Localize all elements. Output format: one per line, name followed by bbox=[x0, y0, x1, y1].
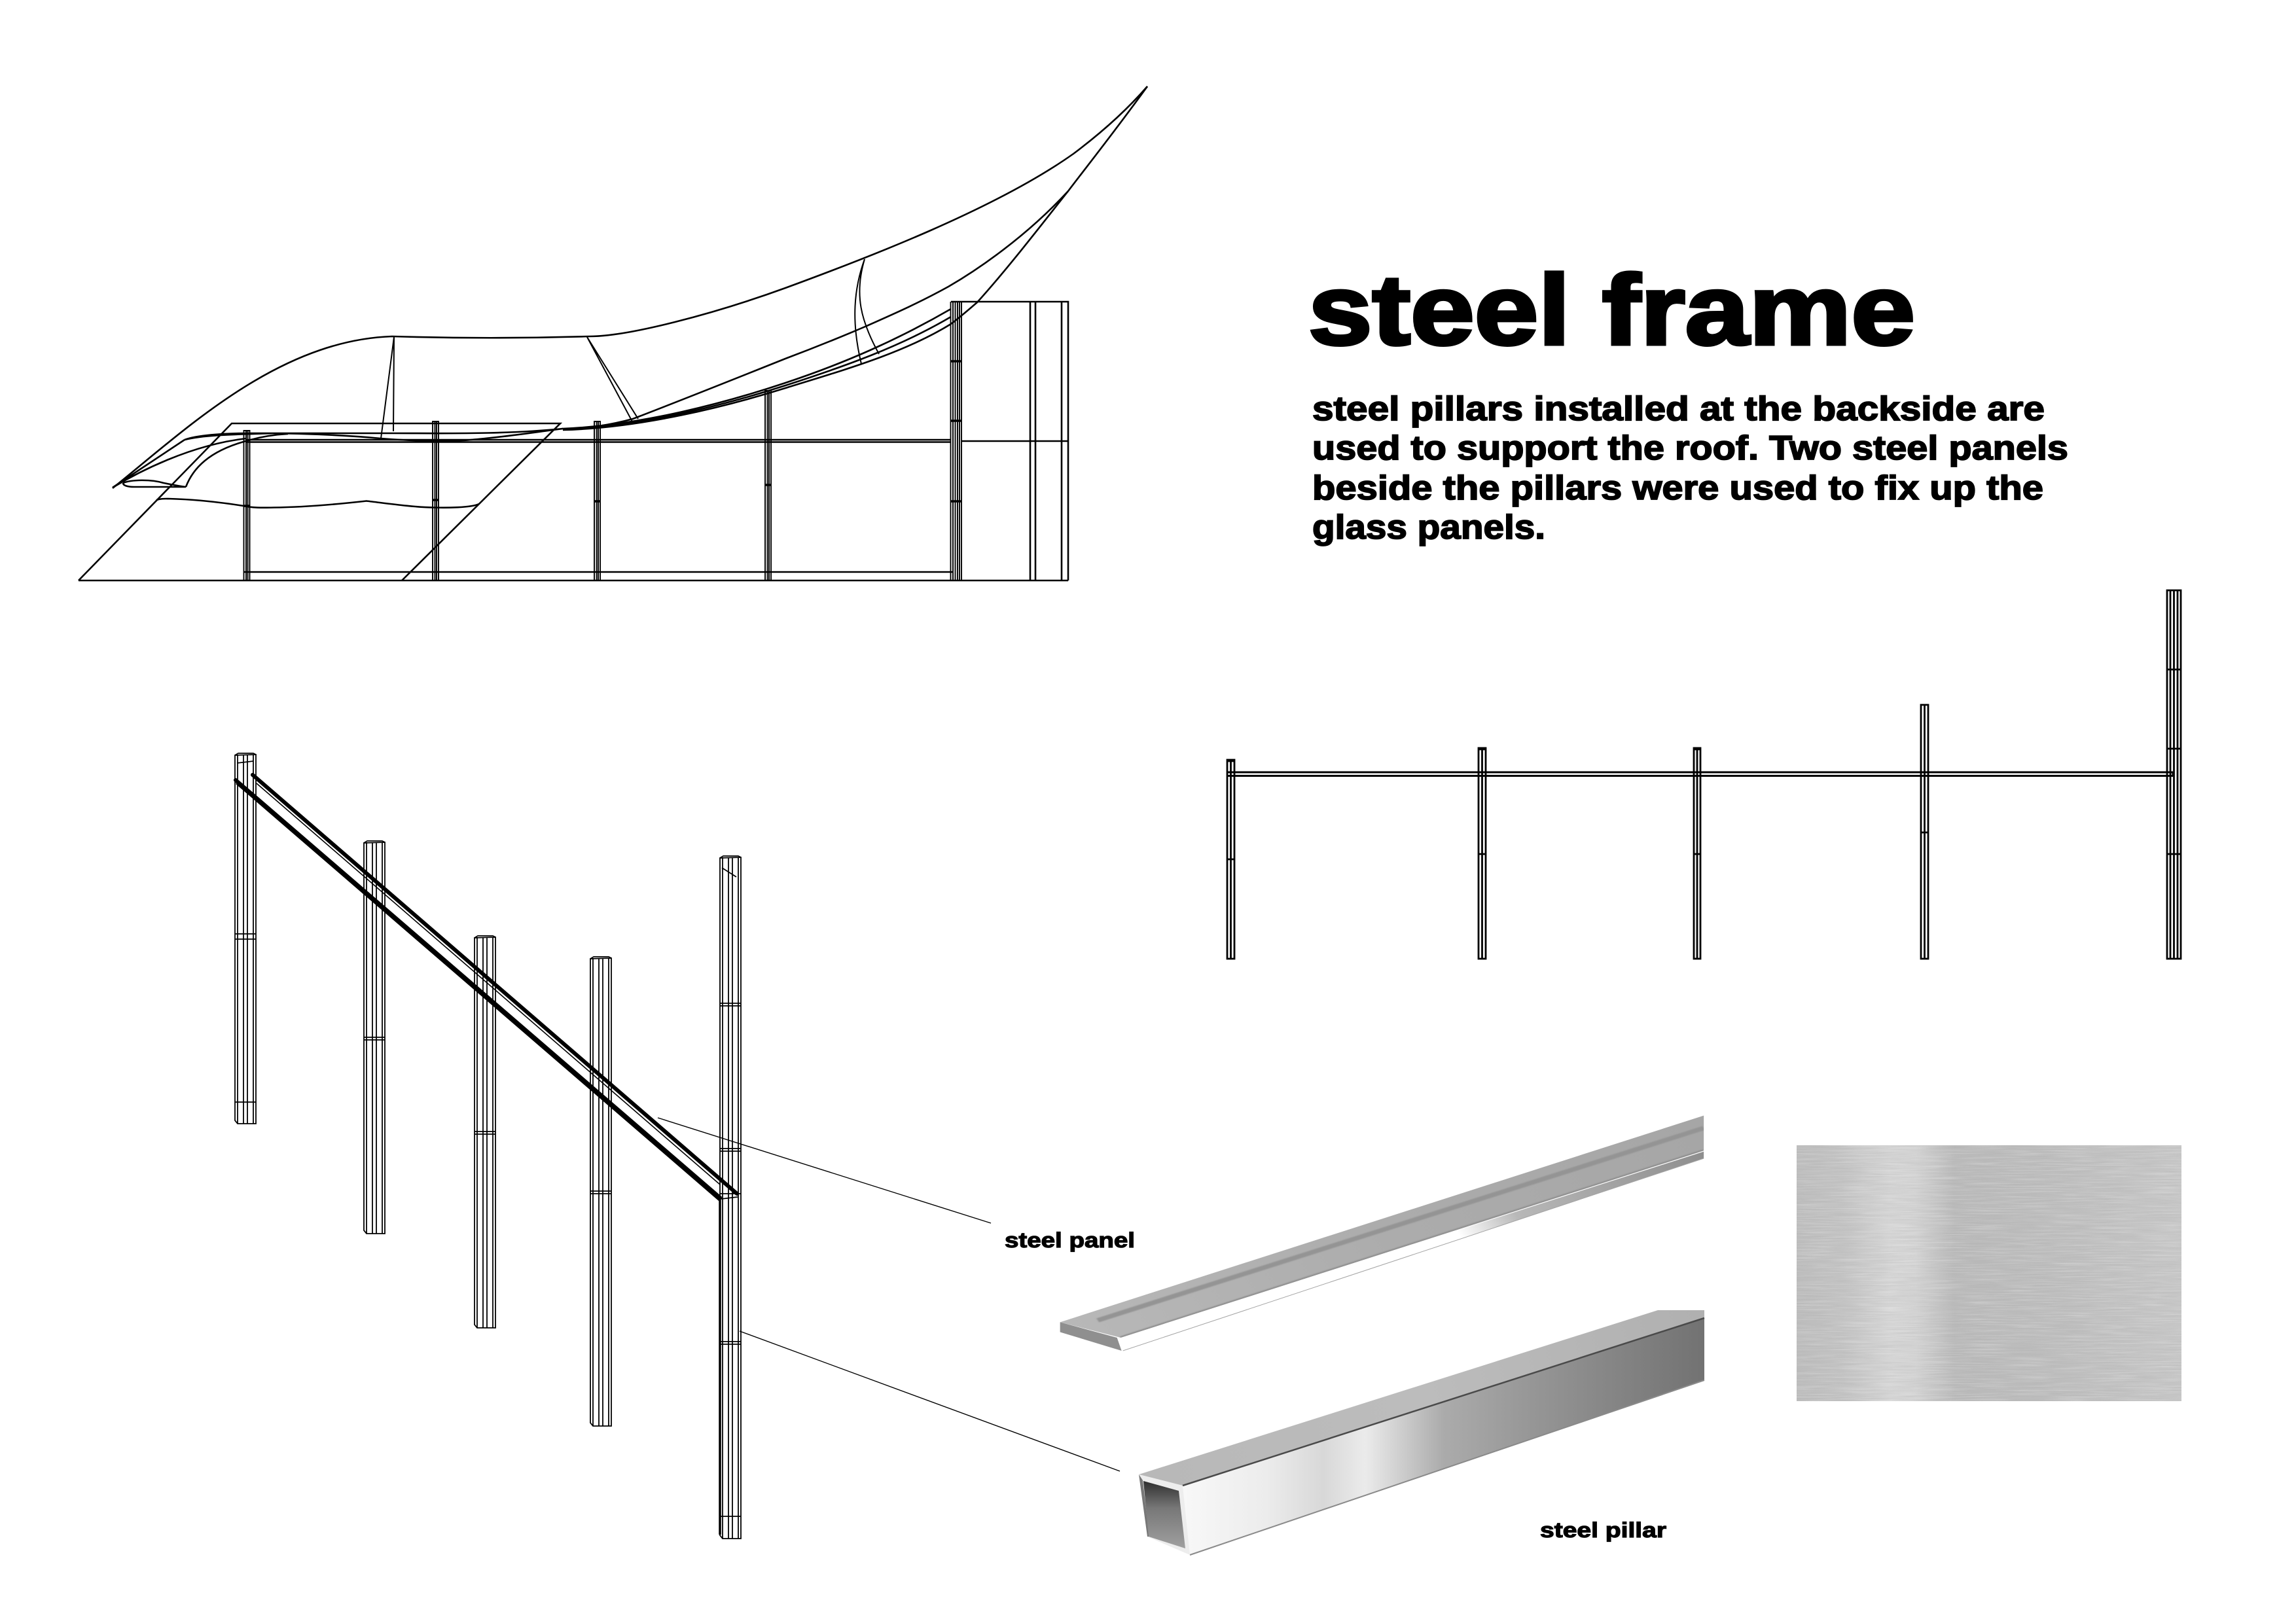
pillar joints bbox=[243, 361, 961, 506]
pillar 3 bbox=[475, 936, 495, 1328]
ground parallelogram bbox=[79, 423, 560, 580]
photo: steel panel bar bbox=[1060, 1111, 1704, 1351]
photo: brushed steel plate bbox=[1797, 1145, 2181, 1401]
pillar 5 bbox=[720, 856, 741, 1539]
horizontal beams bbox=[79, 440, 1068, 580]
label: steel panel: steel panel bbox=[1005, 1228, 1135, 1252]
side face bbox=[1121, 1152, 1704, 1351]
photo: steel pillar tube bbox=[1139, 1310, 1704, 1556]
description text bbox=[1312, 390, 2068, 546]
side face bbox=[1183, 1318, 1704, 1555]
title: steel frame bbox=[1308, 255, 1915, 366]
label: steel pillar: steel pillar bbox=[1540, 1518, 1666, 1542]
roof braces bbox=[381, 259, 879, 438]
drawing: wireframe side elevation of roof and frame bbox=[79, 86, 1147, 580]
leader line: steel pillar bbox=[740, 1331, 1120, 1471]
description text: used to support the roof. Two steel panels bbox=[1312, 429, 2068, 467]
description text: glass panels. bbox=[1312, 508, 1545, 546]
top face bbox=[1139, 1310, 1704, 1486]
diagonal panels bbox=[236, 775, 737, 1198]
roof outline bbox=[113, 86, 1147, 488]
roof lower edges bbox=[951, 86, 1147, 324]
beam bbox=[1227, 772, 2173, 776]
wavy edge bbox=[156, 499, 479, 508]
leader line: steel panel bbox=[658, 1118, 991, 1223]
drawing: front elevation of pillars and beam bbox=[1227, 590, 2181, 959]
pillar 4 bbox=[590, 957, 611, 1426]
roof left tip curves bbox=[113, 434, 288, 488]
pillar 2 bbox=[364, 841, 385, 1234]
drawing: axonometric view of pillars and panels bbox=[235, 753, 1120, 1539]
front face bbox=[1060, 1322, 1122, 1351]
pillars bbox=[1227, 760, 1234, 959]
top face bbox=[1060, 1116, 1704, 1338]
pillar 1 bbox=[235, 753, 256, 1124]
pillars and frame bbox=[243, 302, 961, 580]
right end frame bbox=[951, 302, 1068, 580]
end face bbox=[1139, 1474, 1190, 1555]
description text: steel pillars installed at the backside are bbox=[1312, 390, 2045, 428]
description text: beside the pillars were used to fix up the bbox=[1312, 469, 2043, 507]
roof underside lines bbox=[185, 429, 563, 441]
